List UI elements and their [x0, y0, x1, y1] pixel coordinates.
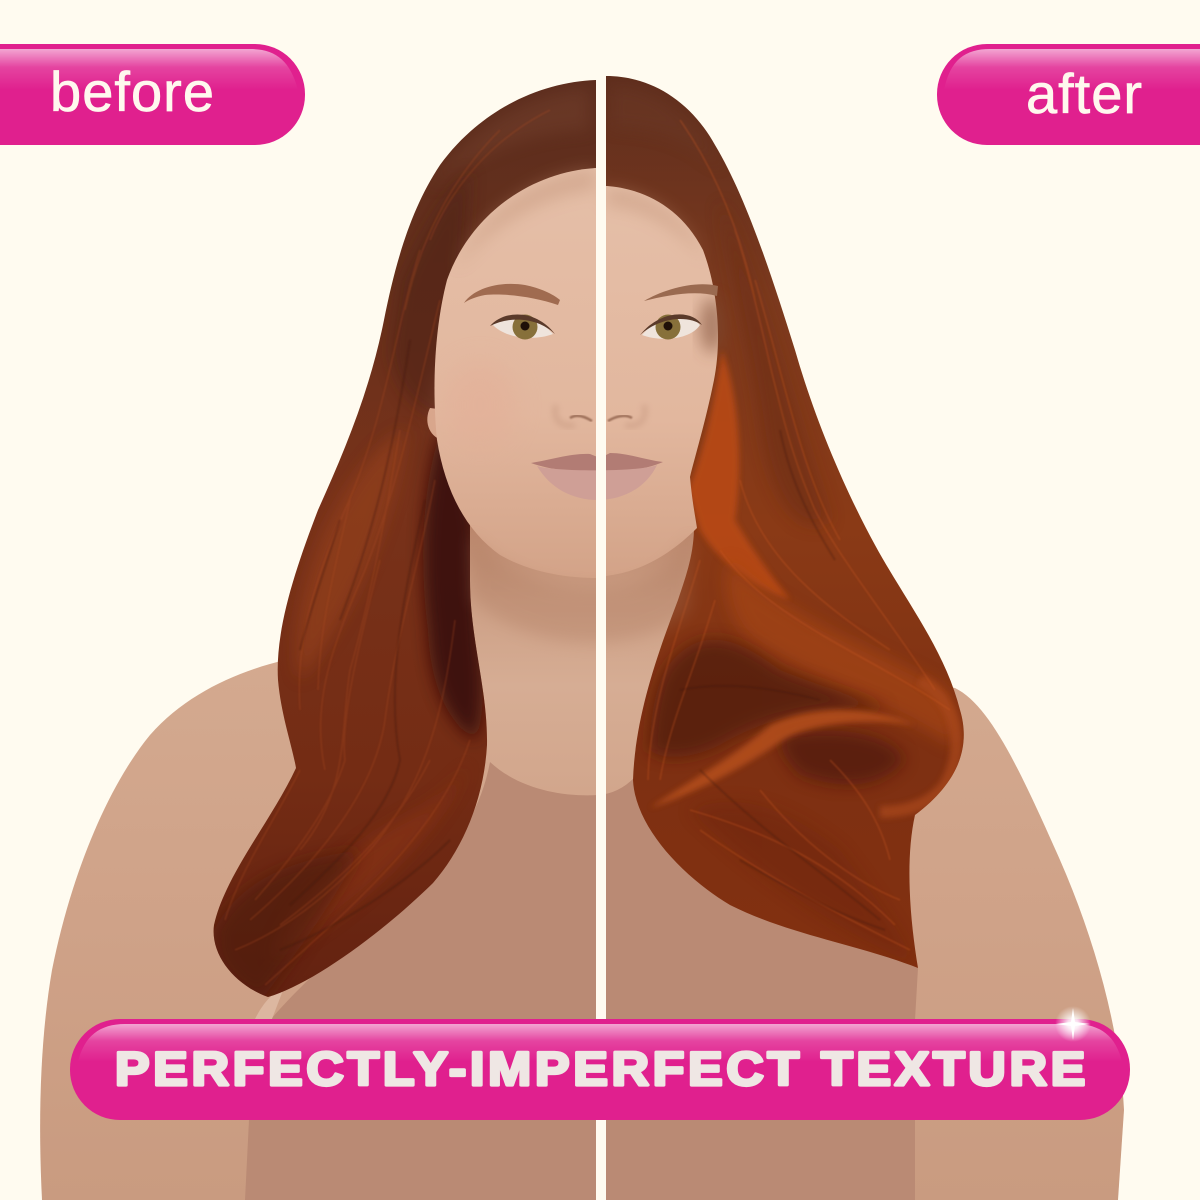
neck and chest	[465, 520, 725, 796]
left eye	[490, 314, 555, 340]
left hair upper dark	[388, 188, 466, 415]
right hair crown sheen	[610, 84, 722, 170]
left hair	[200, 70, 600, 1010]
center divider	[596, 82, 606, 1200]
right eyebrow	[644, 284, 718, 301]
right hair	[600, 70, 980, 980]
headline banner	[70, 1006, 1130, 1120]
after pill	[937, 44, 1200, 145]
before label: before	[50, 60, 214, 123]
right hair orange sweep	[726, 560, 958, 745]
left hair strands	[225, 110, 550, 985]
left hair crown sheen	[483, 97, 584, 144]
right hair dark strands	[680, 430, 885, 930]
chin shadow	[470, 535, 692, 642]
left hair dark inner lock	[423, 420, 483, 740]
garment strap edge	[255, 985, 285, 1019]
left hair tip shadow	[213, 850, 360, 1000]
forehead hairline shade	[455, 168, 705, 270]
right hair outer curl	[880, 680, 957, 812]
right hair bright face-framing strands	[688, 350, 790, 600]
left hair lower band	[302, 804, 439, 934]
right hair strands	[648, 120, 950, 950]
right hair lower shade	[717, 814, 894, 944]
right hair shadow under flick	[780, 730, 905, 785]
cheek blush left	[444, 361, 516, 449]
before pill	[0, 44, 305, 145]
garment	[245, 762, 918, 1200]
lips	[531, 453, 663, 500]
right hair dark mass	[650, 640, 890, 757]
left ear	[427, 408, 446, 440]
after label: after	[1026, 62, 1142, 125]
right eye	[640, 314, 702, 340]
face	[427, 168, 724, 642]
left face	[434, 168, 598, 578]
left hair dark strands	[280, 340, 450, 950]
sparkle	[1055, 1006, 1091, 1042]
right hair upper brown lock	[744, 298, 828, 526]
nose	[555, 405, 645, 426]
right face	[606, 186, 718, 576]
left eyebrow	[464, 284, 560, 305]
left hair bright band	[296, 430, 405, 680]
banner headline text: PERFECTLY-IMPERFECT TEXTURE	[115, 1043, 1085, 1095]
right hair flick strand	[650, 710, 915, 808]
right temple shadow	[700, 297, 724, 353]
shoulders and arms	[40, 640, 1124, 1200]
